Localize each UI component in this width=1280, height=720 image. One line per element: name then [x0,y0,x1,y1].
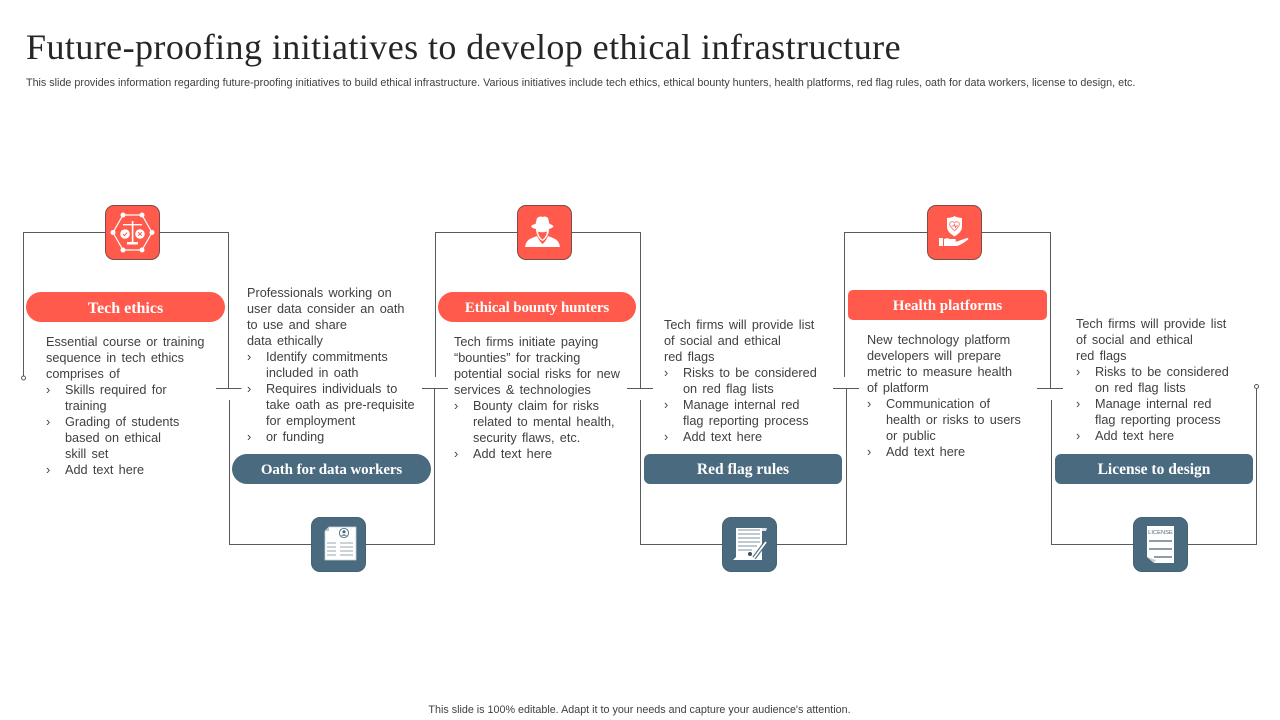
text block: Oath for data workers: data ethically [247,334,323,348]
text block: Tech ethics: skill set [65,447,108,461]
text block: Oath for data workers: Requires individuals to [266,382,397,396]
text block: Red flag rules: Manage internal red [683,398,799,412]
text block: Red flag rules: red flags [664,350,714,364]
text block: Tech ethics: based on ethical [65,431,161,445]
text block: Health platforms: Add text here [886,445,965,459]
heading pill: Ethical bounty hunters: Ethical bounty hunters [465,300,609,316]
heading pill: Ethical bounty hunters [438,292,636,322]
icon: license document: LICENSE [1148,530,1173,536]
text block: Tech ethics [46,335,204,477]
text block: Ethical bounty hunters: related to mental health, [473,415,615,429]
text block: Tech ethics: comprises of [46,367,120,381]
text block: Red flag rules: Risks to be considered [683,366,817,380]
heading pill: Tech ethics [26,292,225,322]
text block: License to design: of social and ethical [1076,333,1193,347]
text block: Tech ethics: Skills required for [65,383,167,397]
heading pill: Oath for data workers [232,454,431,484]
text block: Tech ethics: Grading of students [65,415,179,429]
text block: Health platforms: developers will prepare [867,349,1001,363]
text block: Tech ethics: sequence in tech ethics [46,351,184,365]
text block: License to design: Manage internal red [1095,397,1211,411]
text block: Oath for data workers: for employment [266,414,355,428]
heading pill: Red flag rules [644,454,842,484]
text block: Health platforms: New technology platform [867,333,1010,347]
text block: Ethical bounty hunters: security flaws, etc. [473,431,580,445]
text block: Health platforms: of platform [867,381,929,395]
text block: Oath for data workers: to use and share [247,318,347,332]
text block: Ethical bounty hunters: potential social risks for new [454,367,620,381]
icon: shield on hand [927,205,982,260]
text block: License to design [1076,317,1229,443]
text block: Ethical bounty hunters: Add text here [473,447,552,461]
heading pill: Red flag rules: Red flag rules [697,461,789,478]
text block: Red flag rules: of social and ethical [664,334,781,348]
text block: Health platforms [867,333,1021,459]
heading pill: Oath for data workers: Oath for data workers [261,462,402,478]
heading pill: Health platforms [848,290,1047,320]
text block: License to design: red flags [1076,349,1126,363]
text block: Ethical bounty hunters: “bounties” for tracking [454,351,580,365]
text block: Red flag rules: flag reporting process [683,414,809,428]
text block: Red flag rules: Tech firms will provide list [664,318,814,332]
icon: hat and mask bounty hunter [517,205,572,260]
heading pill: License to design [1055,454,1253,484]
text block: Tech ethics: Essential course or training [46,335,204,349]
text block: Oath for data workers: take oath as pre-requisite [266,398,415,412]
text block: License to design: Tech firms will provide list [1076,317,1226,331]
icon: scales of justice in hexagon [105,205,160,260]
icon: profile document [311,517,366,572]
text block: Oath for data workers: Professionals working on [247,286,392,300]
text block: Health platforms: Communication of [886,397,990,411]
text block: Red flag rules: on red flag lists [683,382,774,396]
footer note: This slide is 100% editable. Adapt it to your needs and capture your audience's attention. [428,704,851,716]
title: Future-proofing initiatives to develop ethical infrastructure [26,27,901,67]
text block: Tech ethics: Add text here [65,463,144,477]
text block: Oath for data workers: or funding [266,430,324,444]
text block: Ethical bounty hunters: Tech firms initiate paying [454,335,598,349]
text block: Health platforms: or public [886,429,936,443]
text block: Ethical bounty hunters: Bounty claim for risks [473,399,599,413]
text block: Oath for data workers: included in oath [266,366,358,380]
heading pill: License to design: License to design [1098,461,1210,478]
text block: Red flag rules [664,318,817,444]
icon: license document [1133,517,1188,572]
text block: Oath for data workers [247,286,415,444]
text block: License to design: Risks to be considered [1095,365,1229,379]
subtitle: This slide provides information regarding future-proofing initiatives to build ethical infrastructure. Various initiatives include tech ethics, ethical bounty hunters, health platforms, red flag rules, oath for data workers, license to design, etc. [26,77,1135,89]
heading pill: Tech ethics: Tech ethics [88,300,163,317]
text block: Ethical bounty hunters [454,335,620,461]
text block: Health platforms: metric to measure health [867,365,1012,379]
text block: License to design: on red flag lists [1095,381,1186,395]
icon: scroll and quill [722,517,777,572]
text block: License to design: Add text here [1095,429,1174,443]
heading pill: Health platforms: Health platforms [893,298,1002,314]
text block: Red flag rules: Add text here [683,430,762,444]
text block: Tech ethics: training [65,399,107,413]
text block: Oath for data workers: user data consider an oath [247,302,404,316]
text block: Oath for data workers: Identify commitments [266,350,388,364]
text block: Health platforms: health or risks to users [886,413,1021,427]
text block: License to design: flag reporting process [1095,413,1221,427]
text block: Ethical bounty hunters: services & technologies [454,383,591,397]
